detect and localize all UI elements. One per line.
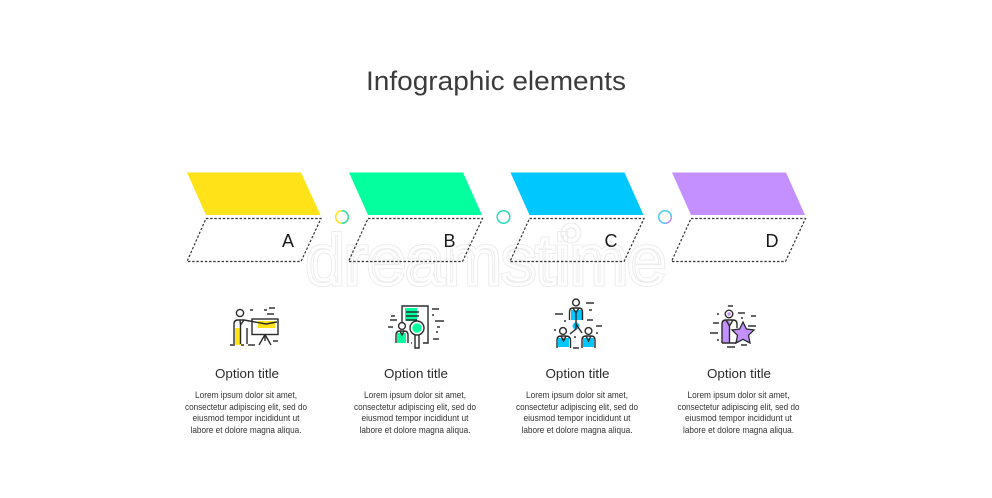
option A text: Lorem ipsum dolor sit amet, bbox=[195, 390, 297, 401]
option A text bbox=[185, 366, 307, 436]
step D bbox=[672, 172, 806, 262]
option C text bbox=[516, 366, 638, 436]
icon: person with star bbox=[710, 306, 756, 347]
option C text: Option title bbox=[546, 366, 610, 381]
option B text: labore et dolore magna aliqua. bbox=[360, 425, 470, 436]
option C text: consectetur adipiscing elit, sed do bbox=[516, 402, 638, 413]
icon: document and magnifier bbox=[388, 306, 444, 348]
connector circle A to B bbox=[336, 211, 348, 223]
option C text: labore et dolore magna aliqua. bbox=[522, 425, 632, 436]
step B bbox=[348, 172, 482, 262]
option D text: Lorem ipsum dolor sit amet, bbox=[688, 390, 790, 401]
text: dreamstime bbox=[306, 221, 666, 299]
icon: team hierarchy bbox=[554, 299, 602, 348]
option C text: eiusmod tempor incididunt ut bbox=[524, 413, 631, 424]
option D text: labore et dolore magna aliqua. bbox=[683, 425, 794, 436]
option D text: Option title bbox=[707, 366, 771, 381]
step A bbox=[187, 172, 321, 262]
option B text: Option title bbox=[384, 366, 448, 381]
option A text: Option title bbox=[215, 366, 279, 381]
option B text: eiusmod tempor incididunt ut bbox=[362, 413, 469, 424]
option B text: consectetur adipiscing elit, sed do bbox=[354, 402, 476, 413]
option D text bbox=[678, 366, 800, 436]
connector circle B to C bbox=[497, 211, 510, 223]
option A text: labore et dolore magna aliqua. bbox=[190, 425, 302, 436]
option B text: Lorem ipsum dolor sit amet, bbox=[364, 390, 466, 401]
icon: presenter at board bbox=[230, 308, 278, 345]
option A text: consectetur adipiscing elit, sed do bbox=[185, 402, 307, 413]
connector circle C to D bbox=[659, 211, 671, 223]
step A: A bbox=[282, 231, 294, 251]
option B text bbox=[354, 366, 476, 436]
text: dreamstime bbox=[306, 221, 666, 299]
title: Infographic elements bbox=[366, 66, 626, 96]
step B: B bbox=[443, 231, 456, 251]
step C: C bbox=[604, 231, 618, 251]
option D text: eiusmod tempor incididunt ut bbox=[685, 413, 792, 424]
option C text: Lorem ipsum dolor sit amet, bbox=[526, 390, 628, 401]
option A text: eiusmod tempor incididunt ut bbox=[192, 413, 300, 424]
step D: D bbox=[766, 231, 778, 251]
step C bbox=[510, 172, 644, 262]
option D text: consectetur adipiscing elit, sed do bbox=[678, 402, 800, 413]
